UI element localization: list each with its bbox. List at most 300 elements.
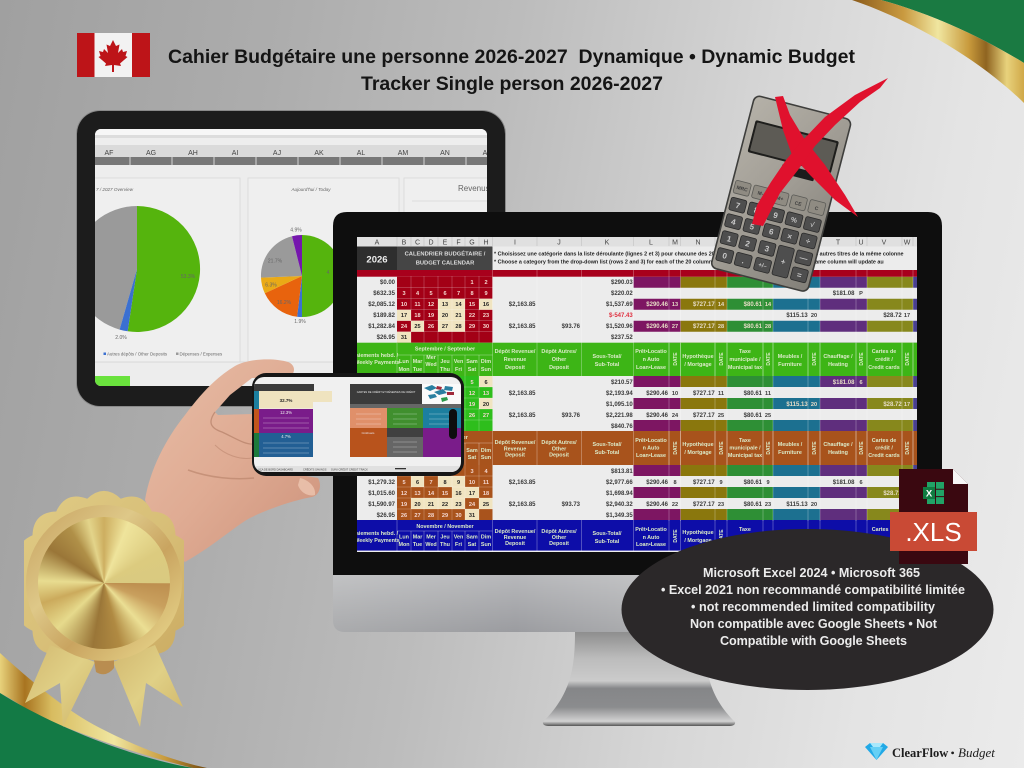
amounts October: $1,279.32: [368, 480, 396, 486]
header: October: DATE: [859, 441, 865, 455]
calculator keys: 3: [764, 244, 771, 254]
header: November: DATE: [719, 529, 725, 543]
calendar August: 28: [455, 324, 462, 330]
amounts October: $727.17: [693, 502, 715, 508]
calendar August: 3: [402, 291, 406, 297]
header: November: Ven: [454, 534, 463, 540]
amounts October: $2,977.66: [606, 480, 633, 486]
phone tab bar: SUIVI CRÉDIT CREDIT TRACK: [331, 466, 368, 472]
panel: today pie: Aujourd'hui / Today: [290, 187, 331, 192]
column letters: Q: [765, 240, 771, 246]
header: November: Deposit: [505, 541, 525, 547]
calendar August: 30: [483, 324, 489, 330]
hand: [145, 359, 320, 562]
header: October: Hypothèque: [682, 442, 714, 448]
spreadsheet column rules: [492, 270, 913, 521]
header: November: Sun: [481, 542, 491, 548]
amounts September: $80.61: [744, 391, 763, 397]
header: September: Revenue: [504, 357, 526, 363]
compatibility oval: Compatible with Google Sheets: [720, 634, 907, 648]
header: November: Novembre / November: [416, 524, 475, 530]
calculator keys: 5: [749, 222, 756, 232]
header: November: Dépôt Revenue/: [495, 529, 536, 535]
calendar August: 21: [455, 313, 462, 319]
canadian flag: [77, 33, 150, 77]
amounts October: $1,698.94: [606, 491, 633, 497]
header: October: Dépôt Autres/: [541, 440, 577, 446]
calendar October: 9: [457, 480, 460, 486]
header: October: Other: [552, 446, 567, 452]
header: November: Sam: [466, 534, 478, 540]
calendar October: 7: [429, 480, 433, 486]
column letters: O: [718, 240, 724, 246]
year and calendar title: BUDGET CALENDAR: [416, 260, 475, 266]
amounts August: 28: [718, 324, 724, 330]
panel: today pie: 1.9%: [294, 319, 306, 325]
xls label: .XLS: [905, 517, 962, 547]
calendar October: 5: [402, 480, 406, 486]
header: October: Dépôt Revenue/: [495, 440, 536, 446]
calculator keys: 2: [744, 239, 751, 249]
amounts September: $727.17: [693, 391, 715, 397]
amounts August: $28.72: [883, 313, 902, 319]
panel: today pie: 4: [327, 270, 330, 276]
column letters: K: [605, 240, 610, 246]
amounts September: 10: [672, 391, 678, 397]
header: September: Hypothèque: [682, 354, 714, 360]
tablet with charts: AF: [105, 150, 113, 157]
header: October: municipale /: [729, 446, 761, 452]
amounts August: $181.08: [833, 291, 855, 297]
panel: overview pie: 7 / 2027 Overview: [96, 187, 134, 192]
amounts August: $80.61: [744, 302, 763, 308]
amounts August: 14: [765, 302, 772, 308]
compatibility oval: [622, 529, 994, 690]
amounts August: $2,163.85: [509, 302, 536, 308]
header: September: aiements hebd. /: [356, 353, 399, 359]
amounts September: $2,163.85: [509, 413, 536, 419]
header: November: DATE: [673, 529, 679, 543]
amounts September: 17: [904, 402, 910, 408]
header: November: Thu: [440, 542, 450, 548]
amounts October: $80.61: [744, 502, 763, 508]
calendar October: 27: [414, 513, 421, 519]
calendar September: 19: [469, 402, 475, 408]
calculator keys: %: [790, 217, 798, 225]
colored expense columns: [634, 277, 917, 521]
amounts September: $1,095.10: [606, 402, 633, 408]
calculator keys: 8: [753, 206, 760, 216]
tablet with charts: AG: [146, 150, 156, 157]
panel: revenus: Revenus: [458, 184, 490, 193]
column letters: T: [836, 240, 841, 246]
amounts September: $210.57: [611, 380, 633, 386]
column letters: C: [415, 240, 420, 246]
calculator keys: 4: [730, 217, 737, 227]
calendar October: 19: [401, 502, 407, 508]
calendar August: 24: [401, 324, 408, 330]
header: October: Municipal tax: [728, 453, 762, 459]
amounts August: $2,085.12: [368, 302, 396, 308]
tablet with charts: A: [483, 150, 488, 157]
header: October: DATE: [719, 441, 725, 455]
panel: today pie: 16.2%: [277, 300, 292, 306]
amounts August: $290.03: [611, 280, 633, 286]
header: November: Fri: [455, 542, 462, 548]
header: September: Deposit: [549, 365, 569, 371]
calendar August: 20: [442, 313, 448, 319]
amounts August: $290.46: [646, 302, 669, 308]
calendar August: 15: [469, 302, 475, 308]
calendar October: 30: [455, 513, 462, 519]
amounts September: 20: [811, 402, 817, 408]
header: October: DATE: [812, 441, 818, 455]
column letters: D: [428, 240, 434, 246]
header: October: DATE: [905, 441, 911, 455]
amounts October: $290.46: [646, 480, 669, 486]
header: November: Dépôt Autres/: [541, 529, 577, 535]
calendar October: 29: [442, 513, 448, 519]
column letters: W: [904, 240, 911, 246]
amounts September: $727.17: [693, 413, 715, 419]
header: September: Loan•Lease: [636, 365, 666, 371]
amounts September: $93.76: [562, 413, 581, 419]
calculator keys: 7: [734, 201, 742, 211]
header: November: Mon: [398, 542, 410, 548]
header: September: DATE: [719, 352, 725, 366]
calendar August: 4: [416, 291, 420, 297]
phone left tiles: 4.7%: [281, 434, 291, 439]
amounts August: $-547.43: [609, 313, 633, 319]
header: September: Municipal tax: [728, 365, 762, 371]
header: November: Hypothèque: [682, 530, 714, 536]
panel: today pie: 21.7%: [268, 258, 283, 264]
header: October: Credit cards: [868, 453, 900, 459]
calendar August: 23: [483, 313, 489, 319]
calendar August: 14: [455, 302, 462, 308]
header: October: Deposit: [505, 452, 525, 458]
column letters: B: [402, 240, 407, 246]
calendar August: 6: [443, 291, 447, 297]
header: September: Credit cards: [868, 365, 900, 371]
amounts August: $26.95: [377, 335, 396, 341]
calendar September: 13: [483, 391, 489, 397]
amounts October: $2,163.85: [509, 480, 536, 486]
panel: overview pie: Autres dépôts / Other Deposits: [107, 352, 168, 356]
panel: today pie: [248, 178, 399, 362]
header: November: aiements hebd. /: [356, 531, 399, 537]
header: October: Octobre / October: [422, 435, 469, 441]
calendar August: 26: [428, 324, 434, 330]
calendar August: 22: [469, 313, 475, 319]
excel file icon: [890, 469, 977, 564]
phone right tiles: [350, 384, 461, 457]
amounts August: $1,282.84: [368, 324, 396, 330]
header: October: Meubles /: [778, 442, 803, 448]
calendar September: 26: [469, 413, 475, 419]
calendar August: 8: [470, 291, 474, 297]
amounts October: $28.72: [883, 491, 902, 497]
header: November: n Auto: [643, 535, 660, 541]
brand logo: •: [950, 746, 955, 760]
calendar September: 27: [483, 413, 489, 419]
monitor stand: [543, 632, 735, 726]
header: November: / Mortgage: [684, 538, 712, 544]
tablet with charts: AL: [357, 150, 365, 157]
header: November: Cartes de: [872, 527, 896, 533]
calendar October: 10: [469, 480, 475, 486]
calendar October: 16: [455, 491, 462, 497]
calculator keys: M+: [776, 195, 784, 203]
badge disc: [38, 517, 170, 649]
calendar October: 13: [414, 491, 421, 497]
calculator display: [748, 120, 839, 173]
amounts October: $813.81: [611, 469, 633, 475]
amounts August: $727.17: [693, 324, 715, 330]
amounts October: 22: [672, 502, 678, 508]
amounts October: $93.73: [562, 502, 581, 508]
calendar August: 19: [428, 313, 434, 319]
calendar September: 20: [483, 402, 489, 408]
title: Cahier Budgétaire une personne 2026-2027 Dynamique • Dynamic Budget: [168, 46, 856, 68]
phone left tiles: [254, 384, 332, 457]
calendar October: 11: [483, 480, 489, 486]
panel: overview pie: Dépenses / Expenses: [180, 352, 223, 356]
header: September: Taxe: [739, 349, 751, 355]
header: September: [354, 343, 917, 376]
calendar August: 11: [415, 302, 420, 308]
compatibility oval: Non compatible avec Google Sheets • Not: [690, 617, 938, 631]
amounts September: 6: [859, 380, 863, 386]
amounts October: $290.46: [646, 502, 669, 508]
header: September: DATE: [766, 352, 772, 366]
header: November: Sub-Total: [595, 539, 620, 545]
amounts August: $220.02: [611, 291, 633, 297]
excel logo: X: [926, 488, 933, 500]
header: November: Other: [552, 535, 567, 541]
calendar August: 29: [469, 324, 475, 330]
calendar August: 10: [401, 302, 407, 308]
column letters: E: [443, 240, 448, 246]
panel: today pie: 4.9%: [290, 228, 302, 234]
phone: [252, 373, 464, 476]
compatibility oval: • not recommended limited compatibility: [691, 600, 935, 614]
header: September: Deposit: [505, 365, 525, 371]
calculator keys: MRC: [736, 185, 749, 194]
phone right tiles: Crédit auto: [362, 431, 375, 435]
calculator keys: [715, 180, 826, 283]
title: [168, 46, 856, 95]
calendar October: 20: [414, 502, 421, 508]
amounts October: $1,349.35: [606, 513, 633, 519]
header: October: Sat: [468, 455, 476, 461]
calendar October: 15: [442, 491, 448, 497]
header: October: Heating: [828, 450, 848, 456]
column letters: R: [787, 240, 793, 246]
calendar October: 14: [428, 491, 435, 497]
header: October: Prêt•Locatio: [635, 438, 667, 444]
calendar September: 6: [484, 380, 488, 386]
phone tab bar: UCA DE BORD DASHBOARD: [258, 468, 293, 472]
amounts September: $28.72: [883, 402, 902, 408]
header: September: Meubles /: [778, 354, 803, 360]
brand logo: [865, 743, 995, 760]
header: October: Sun: [481, 455, 491, 461]
panel: overview pie: 53.3%: [181, 274, 196, 280]
amounts October: [368, 469, 902, 519]
year and calendar title: CALENDRIER BUDGÉTAIRE /: [405, 250, 486, 258]
header: November: Lun: [399, 534, 409, 540]
header: October: Sub-Total: [595, 450, 620, 456]
column letters: S: [812, 240, 817, 246]
header: November: Prêt•Locatio: [635, 527, 667, 533]
phone right tiles: CARTES DE CRÉDIT ET RÉSERVES DE CRÉDIT: [357, 389, 416, 394]
calendar October: 4: [484, 469, 488, 475]
title: Tracker Single person 2026-2027: [361, 73, 663, 95]
phone left tiles: 32.7%: [280, 398, 292, 403]
tablet with charts: AH: [188, 150, 198, 157]
amounts August: $93.76: [562, 324, 581, 330]
phone tab bar: [254, 466, 461, 472]
amounts September: $290.46: [646, 391, 669, 397]
header: November: Deposit: [549, 541, 569, 547]
calendar September: 5: [470, 380, 474, 386]
amounts October: $2,163.85: [509, 502, 536, 508]
amounts August: $2,163.85: [509, 324, 536, 330]
brand logo: Budget: [958, 745, 995, 760]
tablet with charts: AJ: [273, 150, 281, 157]
header: November: Taxe: [739, 527, 751, 533]
monitor bezel: [333, 212, 942, 575]
header: November: Tue: [413, 542, 422, 548]
header: October: Chauffage /: [823, 442, 853, 448]
year and calendar title: [357, 246, 492, 270]
calculator keys: +: [780, 257, 787, 267]
header: November: Wed: [425, 542, 437, 548]
calculator keys: √: [809, 221, 815, 229]
calendar October: 24: [469, 502, 476, 508]
header: October: Loan•Lease: [636, 453, 666, 459]
calculator keys: ÷: [805, 237, 812, 246]
amounts October: $1,015.60: [368, 491, 396, 497]
amounts August: $290.46: [646, 324, 669, 330]
header: September: DATE: [673, 352, 679, 366]
amounts August: 27: [672, 324, 678, 330]
amounts August: 14: [718, 302, 725, 308]
column letters: N: [695, 240, 701, 246]
amounts August: $1,520.96: [606, 324, 633, 330]
amounts September: 24: [672, 413, 679, 419]
calculator keys: M-: [757, 190, 764, 198]
header: October: crédit /: [875, 446, 893, 452]
amounts September: [509, 380, 910, 430]
header: September: Ven: [454, 359, 463, 365]
header: September: Mar: [413, 359, 423, 365]
amounts September: 11: [765, 391, 771, 397]
header: October: Cartes de: [872, 438, 896, 444]
amounts August: $237.52: [611, 335, 633, 341]
badge ring: [32, 511, 176, 655]
calendar October: 26: [401, 513, 407, 519]
calculator keys: 0: [721, 251, 729, 261]
header: September: Sun: [481, 367, 491, 373]
calculator keys: .: [741, 256, 745, 265]
column letters: [357, 237, 917, 246]
header: September: Dim: [481, 359, 491, 365]
tablet with charts: AI: [232, 150, 238, 157]
header: September: Sub-Total: [595, 362, 620, 368]
amounts September: $115.13: [786, 402, 808, 408]
header: September: Sam: [466, 359, 478, 365]
header: October: Deposit: [549, 452, 569, 458]
red X: [752, 78, 888, 226]
header: September: Mon: [398, 367, 410, 373]
amounts August: $727.17: [693, 302, 715, 308]
amounts September: $2,221.98: [606, 413, 633, 419]
header: September: DATE: [859, 352, 865, 366]
tablet with charts: AM: [398, 150, 408, 157]
corner ribbon: bottom left: [0, 653, 207, 768]
amounts September: $80.61: [744, 413, 763, 419]
header: September: Wed: [425, 362, 437, 368]
header: October: [464, 431, 917, 465]
header: October: DATE: [766, 441, 772, 455]
amounts September: $290.46: [646, 413, 669, 419]
header: October: Dim: [481, 448, 491, 454]
badge scallop: [24, 490, 184, 654]
amounts October: 9: [719, 480, 723, 486]
header: September: Cartes de: [872, 349, 896, 355]
badge tab: [94, 660, 114, 674]
panel: overview pie: 2.0%: [115, 335, 127, 341]
calendar August: 18: [414, 313, 421, 319]
phone left tiles: 12.3%: [280, 410, 292, 415]
calculator keys: CE: [794, 200, 803, 208]
header: September: Tue: [413, 367, 422, 373]
calculator keys: =: [796, 270, 803, 280]
amounts August: [368, 280, 910, 341]
header: November: Dim: [481, 534, 491, 540]
calculator keys: 6: [768, 227, 775, 237]
header: September: / Mortgage: [684, 362, 712, 368]
amounts September: $840.76: [611, 424, 633, 430]
calendar October: 23: [455, 502, 462, 508]
header: September: Sous-Total/: [593, 354, 622, 360]
amounts October: 23: [718, 502, 724, 508]
corner ribbon: top right: [852, 0, 1024, 103]
year and calendar title: 2026: [366, 254, 388, 266]
instructions: * Choose a category from the drop-down list (rows 2 and 3) for each of the 20 columns. Once selected, the other titles in the same column will update au: [494, 260, 884, 266]
amounts September: 11: [718, 391, 724, 397]
calendar October: 12: [401, 491, 407, 497]
amounts August: $0.00: [380, 280, 396, 286]
monitor screen: budget spreadsheet: [354, 237, 917, 552]
header: September: Lun: [399, 359, 409, 365]
column letters: V: [882, 240, 887, 246]
header: November: Mer: [426, 534, 437, 540]
calendar August: 31: [401, 335, 407, 341]
header: September: Dépôt Revenue/: [495, 349, 536, 355]
header: September: Sat: [468, 367, 476, 373]
calendar October: 6: [416, 480, 419, 486]
calendar October: 31: [469, 513, 475, 519]
header: November: Loan•Lease: [636, 542, 666, 548]
amounts October: 6: [859, 480, 863, 486]
amounts October: 8: [673, 480, 677, 486]
header: October: Revenue: [504, 446, 526, 452]
header: September: Heating: [828, 362, 848, 368]
top red band: [357, 270, 917, 277]
